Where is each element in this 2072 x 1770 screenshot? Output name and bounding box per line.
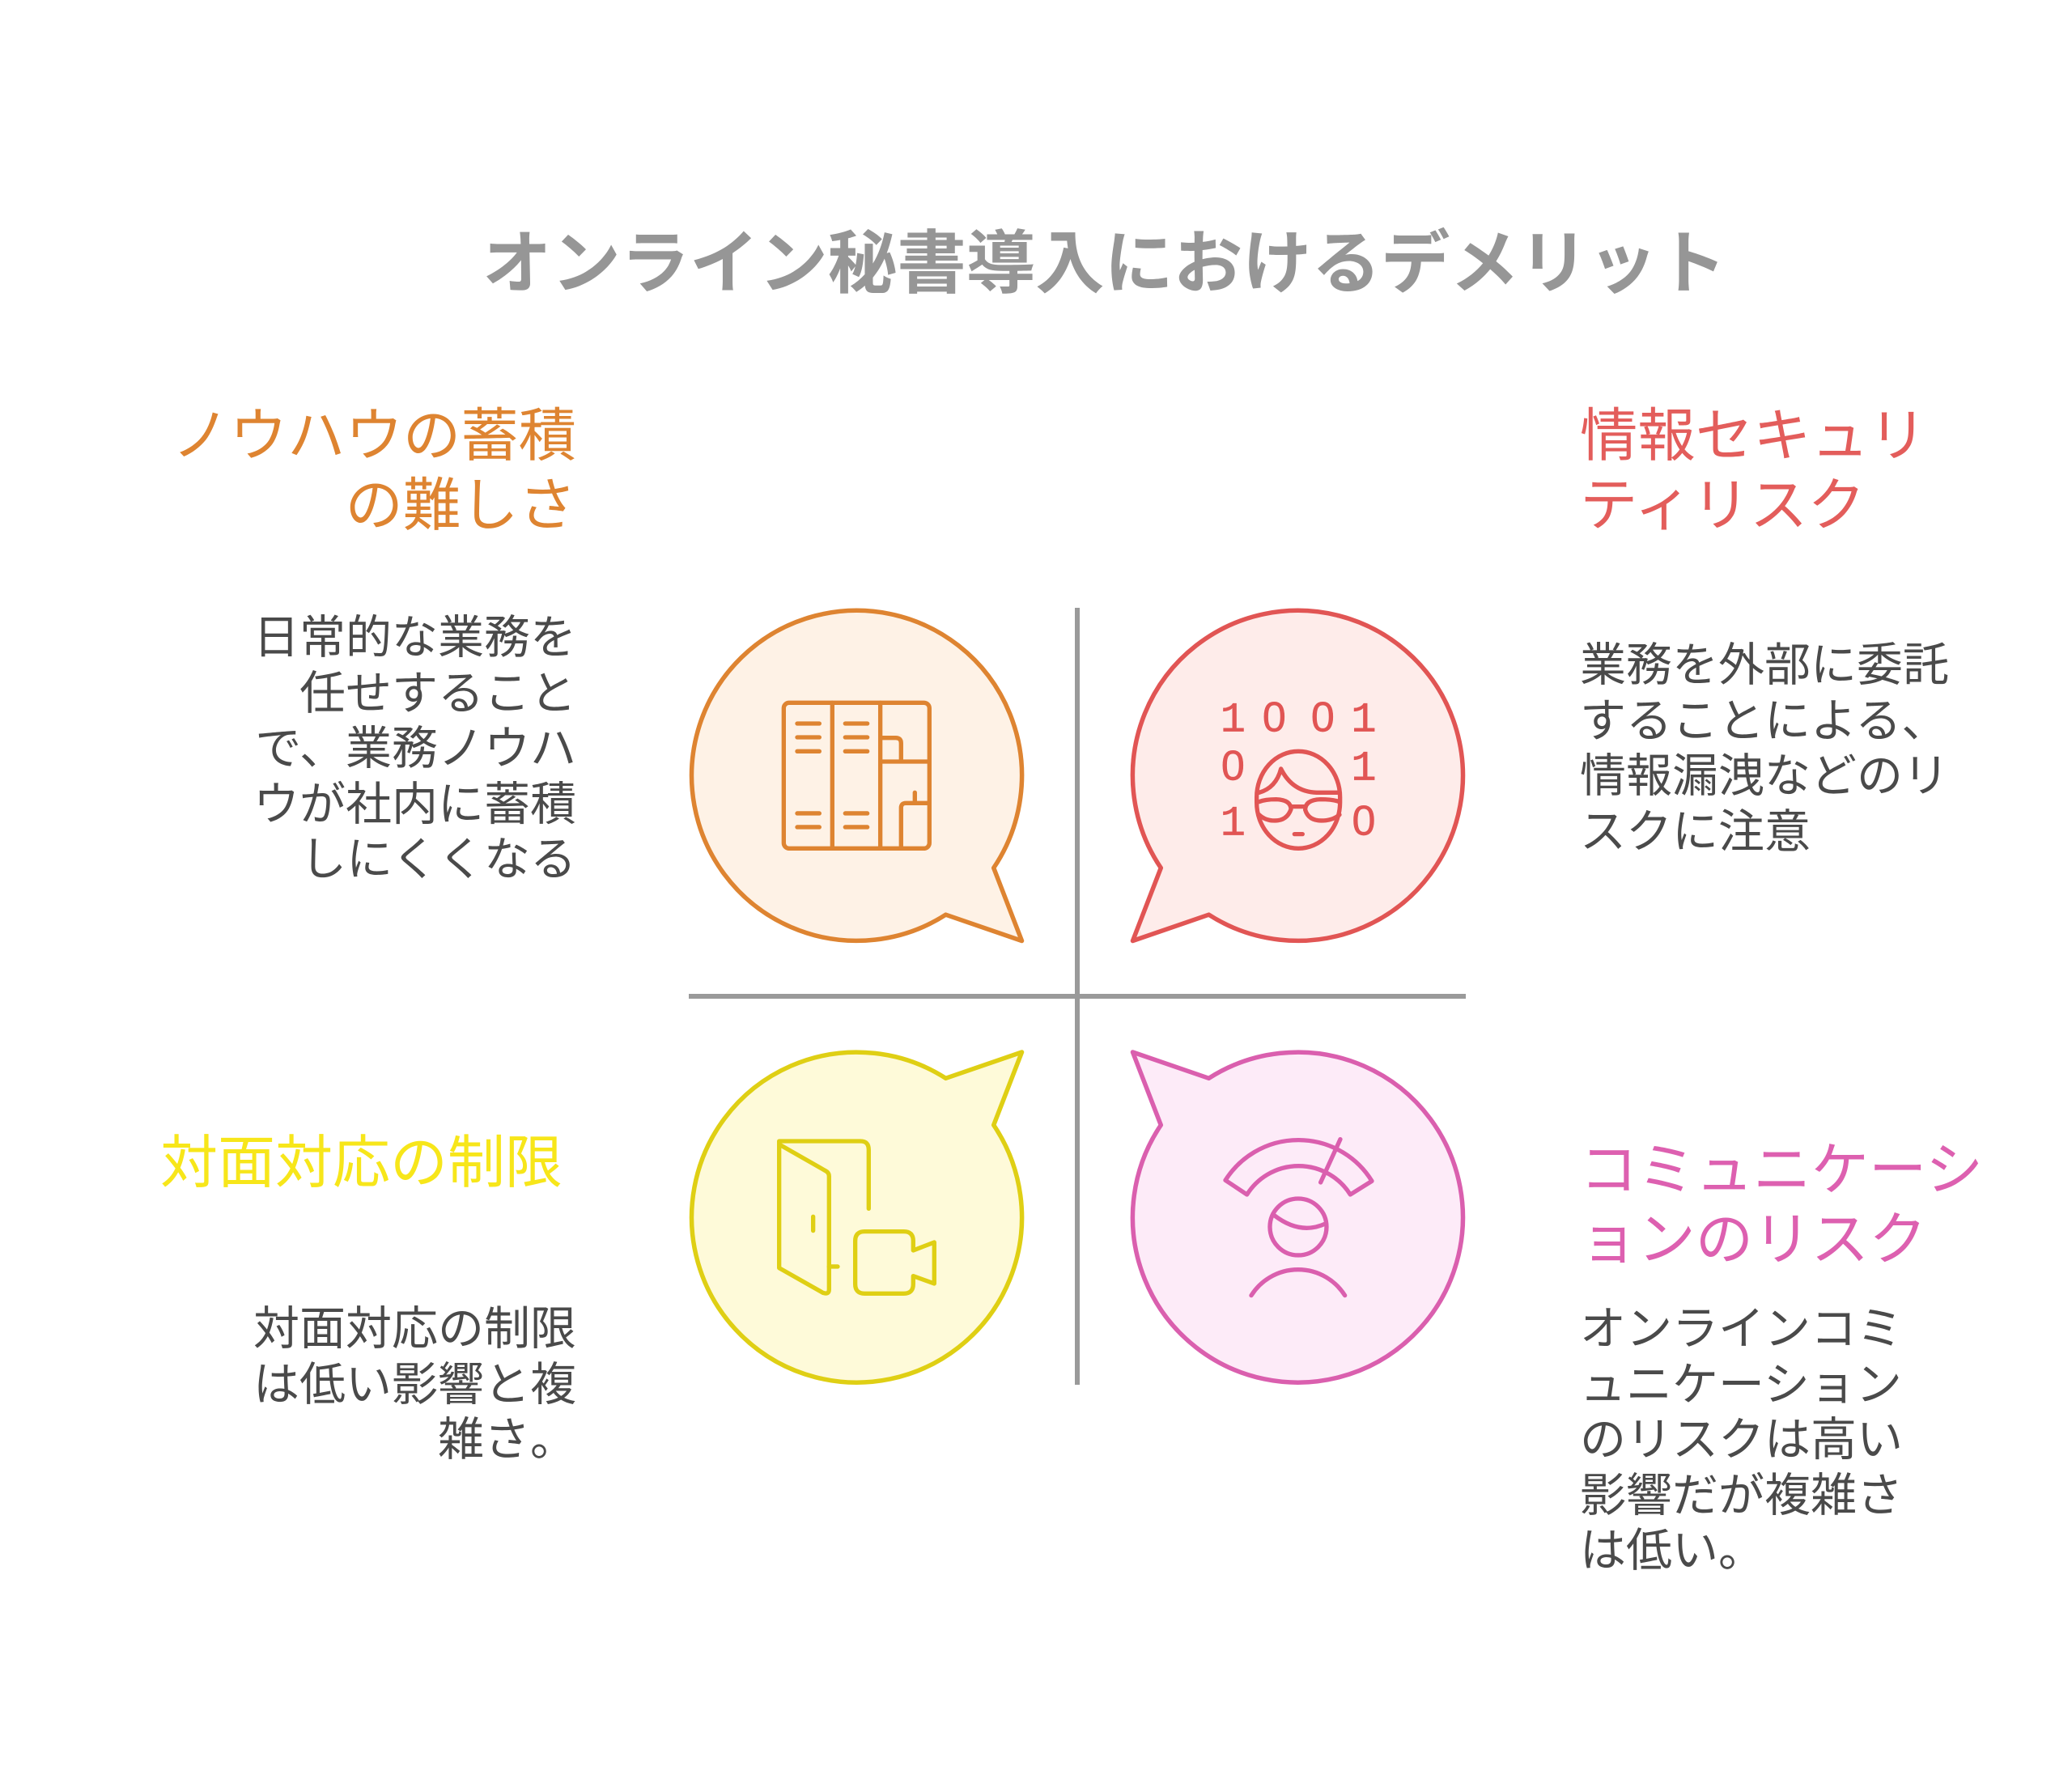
text: knowledge accumulation: で、業務ノウハ bbox=[255, 723, 576, 775]
speech bubble: red bbox=[1132, 610, 1463, 940]
heading: knowledge accumulation bbox=[172, 404, 576, 538]
text: knowledge accumulation: 任せすること bbox=[299, 668, 576, 719]
icon: binary digits and person with glasses: 0 bbox=[1311, 694, 1335, 741]
icon: binary digits and person with glasses: 1 bbox=[1351, 745, 1377, 792]
text: knowledge accumulation bbox=[253, 612, 576, 885]
text: communication risk: オンラインコミ bbox=[1580, 1303, 1903, 1355]
text: communication risk: は低い。 bbox=[1580, 1525, 1764, 1577]
text: information security: 情報漏洩などのリ bbox=[1580, 750, 1949, 802]
text: communication risk: 影響だが複雑さ bbox=[1580, 1470, 1903, 1522]
axis: vertical bbox=[1075, 608, 1080, 1385]
text: face-to-face limits: は低い影響と複 bbox=[253, 1359, 576, 1411]
text: information security: することによる、 bbox=[1580, 695, 1947, 747]
heading: communication risk bbox=[1580, 1138, 1983, 1272]
text: information security: 業務を外部に委託 bbox=[1580, 639, 1949, 691]
icon: person with broken wifi bbox=[1225, 1140, 1372, 1296]
speech bubble: orange bbox=[692, 610, 1022, 940]
icon: binary digits and person with glasses: 0 bbox=[1221, 742, 1245, 789]
icon: door and video camera bbox=[779, 1141, 934, 1293]
text: communication risk bbox=[1580, 1303, 1903, 1577]
icon: bookshelf bbox=[783, 702, 929, 848]
text: communication risk: のリスクは高い bbox=[1580, 1414, 1903, 1466]
icon: binary digits and person with glasses: 0 bbox=[1352, 798, 1375, 845]
heading: knowledge accumulation: の難しさ bbox=[345, 473, 576, 538]
axis: horizontal bbox=[689, 994, 1466, 999]
heading: knowledge accumulation: ノウハウの蓄積 bbox=[172, 404, 576, 469]
heading: face-to-face limits: 対面対応の制限 bbox=[160, 1131, 563, 1195]
heading: communication risk: コミュニケーシ bbox=[1580, 1138, 1983, 1203]
text: knowledge accumulation: ウが社内に蓄積 bbox=[253, 779, 576, 830]
text: information security: スクに注意 bbox=[1580, 806, 1811, 858]
speech bubble: yellow bbox=[692, 1052, 1022, 1382]
text: knowledge accumulation: しにくくなる bbox=[300, 834, 576, 885]
text: face-to-face limits: 対面対応の制限 bbox=[253, 1303, 576, 1355]
text: communication risk: ュニケーション bbox=[1580, 1359, 1902, 1411]
icon: binary digits and person with glasses: 1 bbox=[1221, 800, 1246, 848]
text: face-to-face limits: 雑さ。 bbox=[438, 1414, 576, 1466]
icon: binary digits and person with glasses bbox=[1221, 694, 1377, 848]
speech bubble: pink bbox=[1132, 1052, 1463, 1382]
heading: communication risk: ョンのリスク bbox=[1580, 1208, 1926, 1272]
heading: information security: 情報セキュリ bbox=[1580, 404, 1926, 469]
icon: binary digits and person with glasses: 0 bbox=[1263, 694, 1286, 741]
icon: binary digits and person with glasses: 1 bbox=[1221, 696, 1246, 744]
icon: binary digits and person with glasses: 1 bbox=[1351, 696, 1377, 744]
text: information security bbox=[1580, 639, 1949, 858]
heading: information security bbox=[1580, 404, 1926, 538]
text: face-to-face limits bbox=[253, 1303, 576, 1466]
heading: information security: ティリスク bbox=[1580, 473, 1866, 538]
text: knowledge accumulation: 日常的な業務を bbox=[253, 612, 576, 664]
title: オンライン秘書導入におけるデメリット bbox=[482, 226, 1726, 303]
